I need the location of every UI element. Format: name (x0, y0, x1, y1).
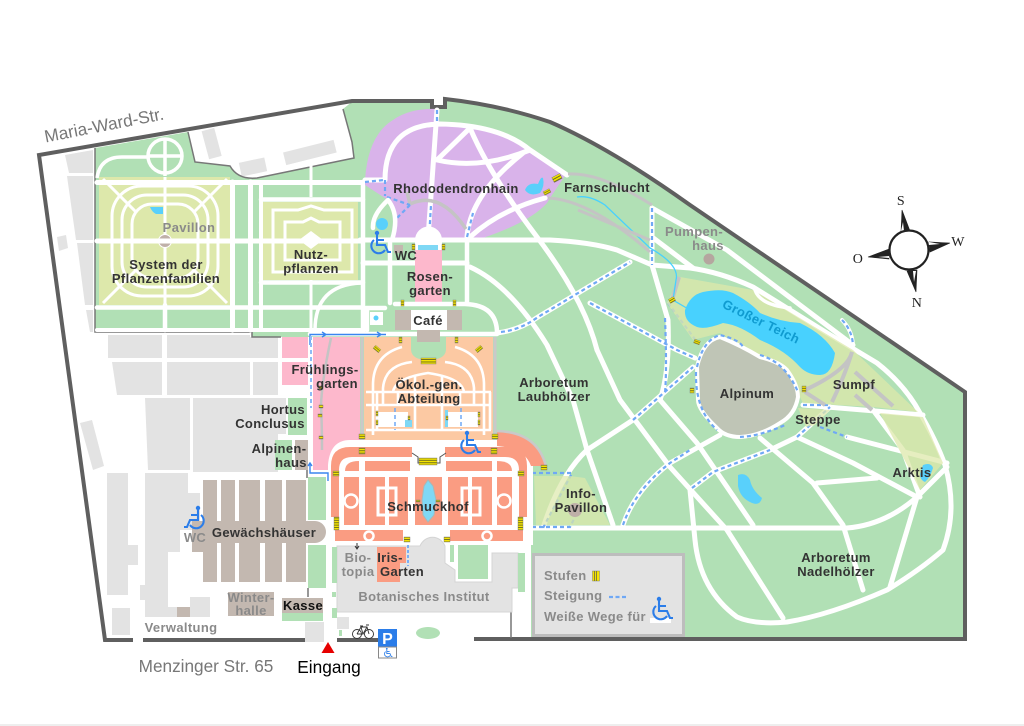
label Sumpf: Sumpf (833, 377, 875, 392)
label Winterhalle: Winter- (227, 590, 275, 605)
basin (418, 245, 438, 250)
Kasse green (282, 613, 323, 621)
icon: Pumpenhaus dot (704, 254, 714, 264)
icon: compass (868, 210, 950, 292)
panel: Ökologisch-genetische Abteilung (362, 337, 495, 442)
top circular lawn (97, 138, 183, 178)
pond (525, 178, 544, 194)
label Kasse: Kasse (283, 598, 323, 613)
white inner loop (755, 290, 790, 308)
purple area (365, 109, 567, 238)
label Café: Café (413, 313, 443, 328)
label Pavillon: Pavillon (163, 220, 215, 235)
Info pavilion meadow (534, 476, 610, 525)
label Ökol.-gen. Abteilung: Abteilung (397, 391, 461, 406)
icon: wheelchair Gewächshäuser (184, 506, 204, 528)
Alpinum dashed ring (696, 335, 798, 437)
white terrace (328, 440, 533, 545)
compass letter W: W (951, 235, 965, 250)
water beds (378, 412, 478, 427)
Steppe meadow (798, 408, 830, 427)
dashed arboretum (501, 208, 847, 528)
label Biotopia: topia (342, 564, 375, 579)
label WC Gewächshäuser: WC (184, 530, 206, 545)
grey paths (672, 277, 893, 410)
label Hortus Conclusus: Hortus (261, 402, 305, 417)
arcs joining alpinum (497, 262, 830, 528)
label Eingang: Eingang (297, 657, 361, 677)
map: upper-left planted lawn extension (360, 300, 500, 545)
label Verwaltung: Verwaltung (145, 620, 217, 635)
legend stufen swatch (592, 571, 600, 581)
compass ring (890, 230, 928, 270)
white surround (310, 200, 497, 334)
panel: grey building blocks west (57, 128, 337, 635)
entrance notch (412, 453, 446, 463)
inner frames (378, 488, 480, 515)
label Rosengarten: garten (409, 283, 451, 298)
small arrow (355, 543, 359, 549)
iris path (407, 545, 409, 566)
label Arboretum Laubhölzer: Arboretum (519, 375, 589, 390)
alpinenhaus house (295, 440, 308, 470)
lower arrow (308, 463, 328, 481)
Großer Teich water (685, 290, 835, 375)
panel: Botanisches Institut (332, 537, 525, 639)
building blocks row one (57, 128, 337, 472)
label System der Pflanzenfamilien: Pflanzenfamilien (112, 271, 220, 286)
brown block west (177, 607, 190, 617)
institute building (337, 537, 518, 612)
panel: System der Pflanzenfamilien (97, 138, 230, 305)
label Alpinenhaus: Alpinen- (252, 441, 306, 456)
concentric arches (366, 347, 491, 435)
map: path network (360, 208, 951, 623)
label Rhododendronhain: Rhododendronhain (393, 181, 519, 196)
building complex west (107, 473, 210, 635)
label Arboretum Laubhölzer: Laubhölzer (518, 389, 590, 404)
side walls (362, 337, 495, 442)
hortus conclusus green (288, 398, 307, 435)
roundel near cafe (370, 312, 383, 325)
Kasse (282, 598, 323, 613)
label Pumpenhaus: haus (692, 238, 724, 253)
icon: bicycle (352, 625, 374, 638)
entrance square (305, 622, 324, 642)
circles (344, 494, 510, 540)
icon: red entrance triangle (322, 642, 334, 653)
compass spikes (868, 210, 950, 292)
sign blue (378, 629, 397, 647)
panel: lake area (548, 174, 943, 504)
panel: legend (534, 554, 684, 636)
label Biotopia: Bio- (345, 550, 371, 565)
compass letter O: O (853, 252, 863, 267)
green oval (416, 627, 440, 639)
label Schmuckhof: Schmuckhof (387, 499, 469, 514)
fountain (422, 480, 436, 522)
panel: Frühlingsgarten (275, 337, 360, 470)
legend stufen label: Stufen (544, 568, 587, 583)
legend box (534, 554, 684, 636)
label Frühlingsgarten: Frühlings- (291, 362, 359, 377)
legend wheelchair (653, 597, 673, 619)
blue ramp dashes (395, 408, 461, 430)
sign plate (378, 647, 396, 658)
legend weisse wege label: Weiße Wege für (544, 609, 646, 624)
Winterhalle (228, 592, 274, 616)
label Iris-Garten: Garten (380, 564, 424, 579)
Alpinum rock garden (697, 337, 798, 437)
arboretum lines (470, 267, 947, 618)
Iris-Garten bed (377, 547, 406, 582)
label Farnschlucht: Farnschlucht (564, 180, 650, 195)
panel: Rosengarten and Café (310, 200, 497, 342)
white paths (365, 110, 597, 350)
compass letter S: S (897, 194, 905, 209)
label Info-Pavillon: Info- (566, 486, 596, 501)
label Großer Teich: Großer Teich (720, 296, 802, 347)
sign wheelchair (385, 648, 392, 657)
label Frühlingsgarten: garten (316, 376, 358, 391)
east arc outline (497, 431, 546, 466)
label Hortus Conclusus: Conclusus (235, 416, 305, 431)
top-right white link near wall (842, 320, 853, 345)
main path loop (360, 240, 951, 623)
small building (337, 617, 349, 629)
Arktis pond (920, 464, 933, 482)
strips (332, 545, 525, 636)
panel: Gewächshäuser (192, 480, 326, 642)
street label Menzinger: Menzinger Str. 65 (139, 656, 273, 676)
label Alpinum: Alpinum (720, 386, 774, 401)
compass highlights (878, 222, 940, 282)
dashed overlay (310, 336, 312, 408)
small forest pond (738, 474, 762, 504)
icon: wheelchair (371, 231, 391, 253)
solid arrow top (310, 332, 386, 345)
pumpenhaus paths (652, 208, 853, 400)
label Arboretum Nadelhölzer: Nadelhölzer (797, 564, 875, 579)
legend steigung label: Steigung (544, 588, 602, 603)
glasshouse wings (192, 480, 326, 582)
stream (577, 197, 690, 310)
basin small (374, 316, 378, 320)
concentric paths (99, 177, 230, 305)
label Botanisches Institut: Botanisches Institut (358, 589, 490, 604)
label Arboretum Nadelhölzer: Arboretum (801, 550, 871, 565)
label Ökol.-gen. Abteilung: Ökol.-gen. (395, 377, 463, 392)
label Alpinenhaus: haus (275, 455, 307, 470)
bed Nutzpflanzen (263, 202, 358, 280)
white grid (97, 182, 470, 332)
Info pavilion dot (568, 503, 582, 517)
bed (99, 177, 230, 305)
legend dash sample (609, 596, 626, 598)
alpinenhaus green (275, 440, 292, 470)
label Iris-Garten: Iris- (377, 550, 403, 565)
grey arc path (407, 192, 466, 229)
label Winterhalle: halle (235, 603, 267, 618)
label Nutzpflanzen: Nutz- (294, 247, 328, 262)
label Gewächshäuser: Gewächshäuser (212, 525, 316, 540)
panel: Rhododendronhain (365, 109, 597, 350)
park green ground (95, 99, 965, 638)
sign letter: P (382, 631, 393, 648)
rose garden bed (415, 250, 442, 303)
fern gorge grey trails (548, 174, 652, 252)
Arktis meadow (880, 413, 943, 490)
compass letter N: N (912, 296, 922, 311)
dashed ramps (365, 110, 473, 238)
cafe label plate (411, 310, 447, 330)
rondell (148, 139, 182, 173)
icon: wheelchair Ökol (461, 431, 481, 453)
label Steppe: Steppe (795, 412, 841, 427)
courtyard green (458, 545, 488, 579)
pavilion dot (158, 234, 172, 248)
peach ground (364, 337, 493, 440)
water (405, 410, 448, 427)
light meadow (667, 277, 918, 412)
label Arktis: Arktis (893, 465, 931, 480)
street label Maria-Ward-Str: Maria-Ward-Str. (43, 104, 165, 146)
label Rosengarten: Rosen- (407, 269, 453, 284)
map border wall (39, 99, 965, 640)
map: lawn between gardens (308, 477, 326, 588)
stairs markers (318, 173, 806, 542)
grey trail (321, 338, 331, 450)
pond (150, 207, 163, 214)
green fountain pool (376, 218, 388, 230)
panel: Schmuckhof (328, 431, 546, 545)
blue accessible arrows (308, 332, 386, 481)
inner boundary line (95, 109, 511, 638)
grey wc block (394, 245, 403, 253)
legend wheelchair white strip (650, 618, 671, 623)
outer ring and top beds (331, 447, 527, 541)
label System der Pflanzenfamilien: System der (129, 257, 203, 272)
label Info-Pavillon: Pavillon (555, 500, 607, 515)
cafe building (395, 310, 462, 342)
dome (415, 227, 442, 250)
pink beds (282, 337, 360, 470)
east arc (497, 431, 545, 466)
label Nutzpflanzen: pflanzen (283, 261, 339, 276)
concentric beds (273, 163, 352, 330)
centre diamond (299, 231, 323, 249)
label Pumpenhaus: Pumpen- (665, 224, 723, 239)
parking sign (378, 629, 397, 658)
panel: paths Nutzpflanzen area (97, 163, 470, 332)
label WC: WC (395, 248, 417, 263)
